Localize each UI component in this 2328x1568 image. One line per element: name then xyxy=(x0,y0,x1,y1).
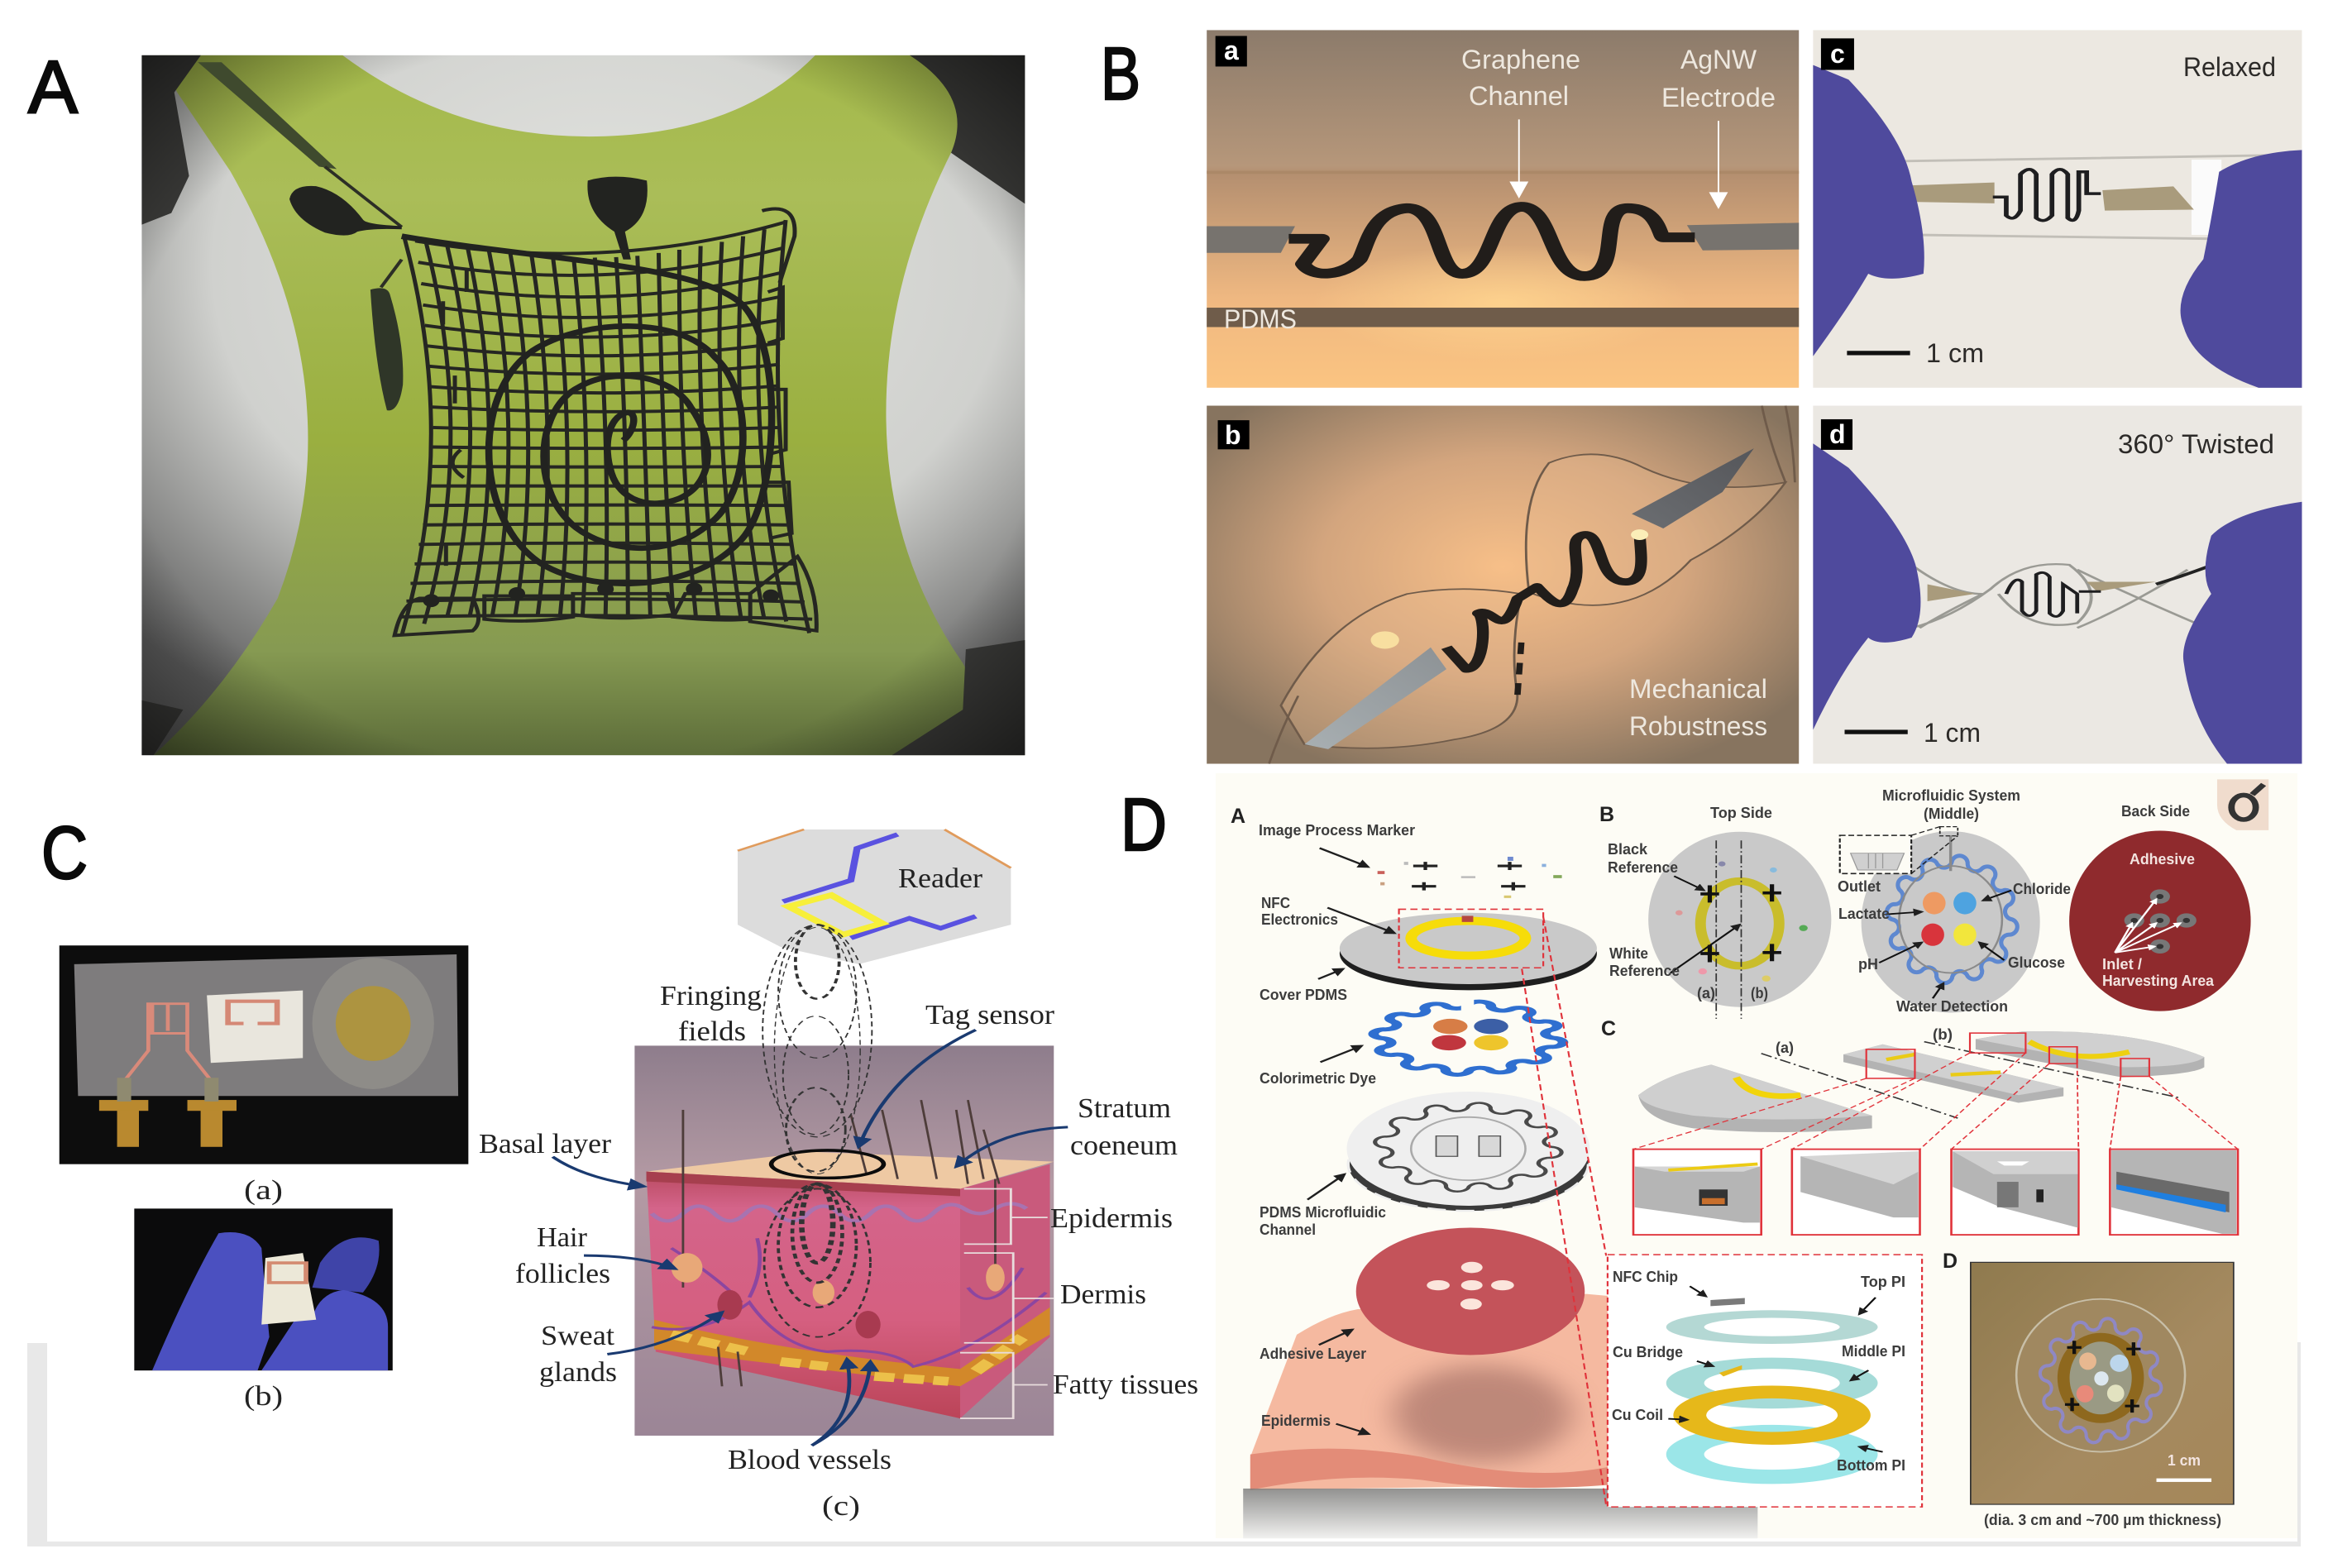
label Mechanical: Mechanical xyxy=(1629,674,1767,704)
Water Detection: Water Detection xyxy=(1896,998,2008,1015)
Middle PI: Middle PI xyxy=(1842,1343,1905,1360)
caption a: (a) xyxy=(244,1175,283,1206)
photo a: antennas and coin xyxy=(60,945,468,1164)
panel letter A: A xyxy=(28,46,78,129)
panel C: wireless tag sensor on skin xyxy=(41,812,1198,1522)
labels stack A xyxy=(1231,805,1415,1429)
label Fatty tissues: Fatty tissues xyxy=(1053,1370,1198,1400)
Black: Black xyxy=(1608,841,1648,858)
Adhesive Layer: Adhesive Layer xyxy=(1260,1346,1366,1362)
labels views B xyxy=(1599,787,2215,1015)
letter B: B xyxy=(1599,803,1614,826)
label Reader: Reader xyxy=(898,863,983,894)
label 360 degrees twisted: 360° Twisted xyxy=(2118,429,2274,459)
views B: top, middle and back discs xyxy=(1648,827,2251,1019)
panel A: stretched serpentine mesh xyxy=(28,46,1025,755)
Cu Bridge: Cu Bridge xyxy=(1613,1344,1683,1360)
panel letter C: C xyxy=(41,812,88,895)
label Basal layer: Basal layer xyxy=(479,1129,612,1159)
labels inset xyxy=(1612,1269,1905,1474)
Lactate: Lactate xyxy=(1838,906,1890,922)
label a: a xyxy=(1224,36,1239,65)
Colorimetric Dye: Colorimetric Dye xyxy=(1260,1070,1376,1087)
label Robustness: Robustness xyxy=(1629,711,1767,741)
Chloride: Chloride xyxy=(2013,881,2071,897)
panel D background xyxy=(1216,773,2297,1538)
panel letter B: B xyxy=(1101,33,1140,116)
corner icon xyxy=(2217,779,2268,830)
exploded stack A xyxy=(1243,848,1757,1538)
sub-panel c: relaxed device photo xyxy=(1813,30,2302,388)
label glands: glands xyxy=(539,1357,617,1388)
scale label 1 cm: 1 cm xyxy=(1924,718,1981,748)
scale 1 cm: 1 cm xyxy=(2168,1452,2201,1469)
label Graphene Channel: Graphene xyxy=(1461,45,1580,74)
panel letter D: D xyxy=(1121,784,1167,867)
section (a): (a) xyxy=(1776,1040,1794,1056)
sub-panel a: planar graphene channel illustration xyxy=(1207,30,1799,388)
Cu Coil: Cu Coil xyxy=(1612,1407,1663,1423)
label coeneum: coeneum xyxy=(1070,1131,1178,1161)
fringing field lines and tag sensor ring xyxy=(762,925,883,1337)
spiral antenna xyxy=(402,237,772,584)
pH: pH xyxy=(1858,956,1878,973)
label Relaxed: Relaxed xyxy=(2183,52,2276,82)
Image Process Marker: Image Process Marker xyxy=(1259,822,1415,839)
panel D: colorimetric microfluidic patch xyxy=(1216,773,2297,1538)
label AgNW: AgNW xyxy=(1680,45,1757,74)
Harvesting Area: Harvesting Area xyxy=(2102,973,2215,989)
label d: d xyxy=(1829,419,1846,449)
label Tag sensor: Tag sensor xyxy=(925,1000,1055,1030)
skin cross-section illustration xyxy=(634,1045,1054,1436)
diagram c: reader module xyxy=(738,829,1011,964)
letter D: D xyxy=(1943,1250,1958,1273)
label Blood vessels: Blood vessels xyxy=(728,1445,892,1475)
caption c: (c) xyxy=(822,1491,860,1522)
photo D: patch on skin xyxy=(1971,1262,2234,1504)
label Stratum: Stratum xyxy=(1078,1093,1171,1124)
letter C: C xyxy=(1601,1017,1616,1040)
label Dermis: Dermis xyxy=(1060,1279,1146,1310)
PDMS Microfluidic: PDMS Microfluidic xyxy=(1260,1204,1386,1221)
Reference: Reference xyxy=(1609,963,1680,979)
letter A: A xyxy=(1231,805,1245,828)
panel B: graphene channel on PDMS xyxy=(1101,30,2302,764)
NFC: NFC xyxy=(1261,895,1290,911)
Adhesive: Adhesive xyxy=(2130,851,2195,868)
label Hair: Hair xyxy=(537,1222,588,1253)
label follicles: follicles xyxy=(515,1259,610,1289)
label fields: fields xyxy=(678,1016,746,1047)
Reference: Reference xyxy=(1608,859,1678,876)
Epidermis: Epidermis xyxy=(1261,1413,1331,1429)
sections C: cut-away views xyxy=(1633,1031,2238,1235)
Channel: Channel xyxy=(1260,1221,1316,1238)
White: White xyxy=(1609,945,1648,962)
labels sections C xyxy=(1601,1017,1953,1056)
label b: b xyxy=(1225,420,1241,450)
caption b: (b) xyxy=(244,1381,283,1412)
Electronics: Electronics xyxy=(1261,911,1338,928)
Glucose: Glucose xyxy=(2008,954,2065,971)
Top PI: Top PI xyxy=(1861,1274,1905,1290)
photo b: flexible tag held in gloved hand xyxy=(134,1208,393,1370)
section (b): (b) xyxy=(1933,1026,1953,1043)
sub-panel b: twisted channel illustration xyxy=(1207,406,1799,764)
Outlet: Outlet xyxy=(1838,878,1881,895)
navy leader arrows xyxy=(552,1030,1068,1446)
(a): (a) xyxy=(1697,985,1715,1002)
label Electrode: Electrode xyxy=(1661,83,1776,112)
sub-panel d: twisted device photo xyxy=(1813,406,2302,764)
label Fringing: Fringing xyxy=(660,981,762,1011)
Inlet: Inlet / xyxy=(2102,956,2142,973)
Cover PDMS: Cover PDMS xyxy=(1260,987,1347,1003)
label Graphene Channel second line: Channel xyxy=(1469,81,1569,111)
label Epidermis: Epidermis xyxy=(1050,1203,1173,1234)
scale label 1 cm: 1 cm xyxy=(1926,338,1984,368)
photo: mesh on stretched green elastomer xyxy=(141,55,1025,755)
NFC Chip: NFC Chip xyxy=(1613,1269,1678,1285)
labels photo D xyxy=(1943,1250,2221,1528)
Back Side: Back Side xyxy=(2121,803,2190,820)
(b): (b) xyxy=(1751,985,1768,1002)
label PDMS: PDMS xyxy=(1224,304,1297,334)
inset: NFC electronics layers xyxy=(1399,909,1922,1507)
Bottom PI: Bottom PI xyxy=(1837,1457,1905,1474)
label c: c xyxy=(1830,39,1845,69)
(Middle): (Middle) xyxy=(1924,806,1979,822)
Microfluidic System: Microfluidic System xyxy=(1882,787,2020,804)
size caption: (dia. 3 cm and ~700 µm thickness) xyxy=(1984,1512,2221,1528)
bottom frame band xyxy=(27,1342,2301,1546)
Top Side: Top Side xyxy=(1710,805,1772,821)
label Sweat: Sweat xyxy=(541,1321,615,1351)
